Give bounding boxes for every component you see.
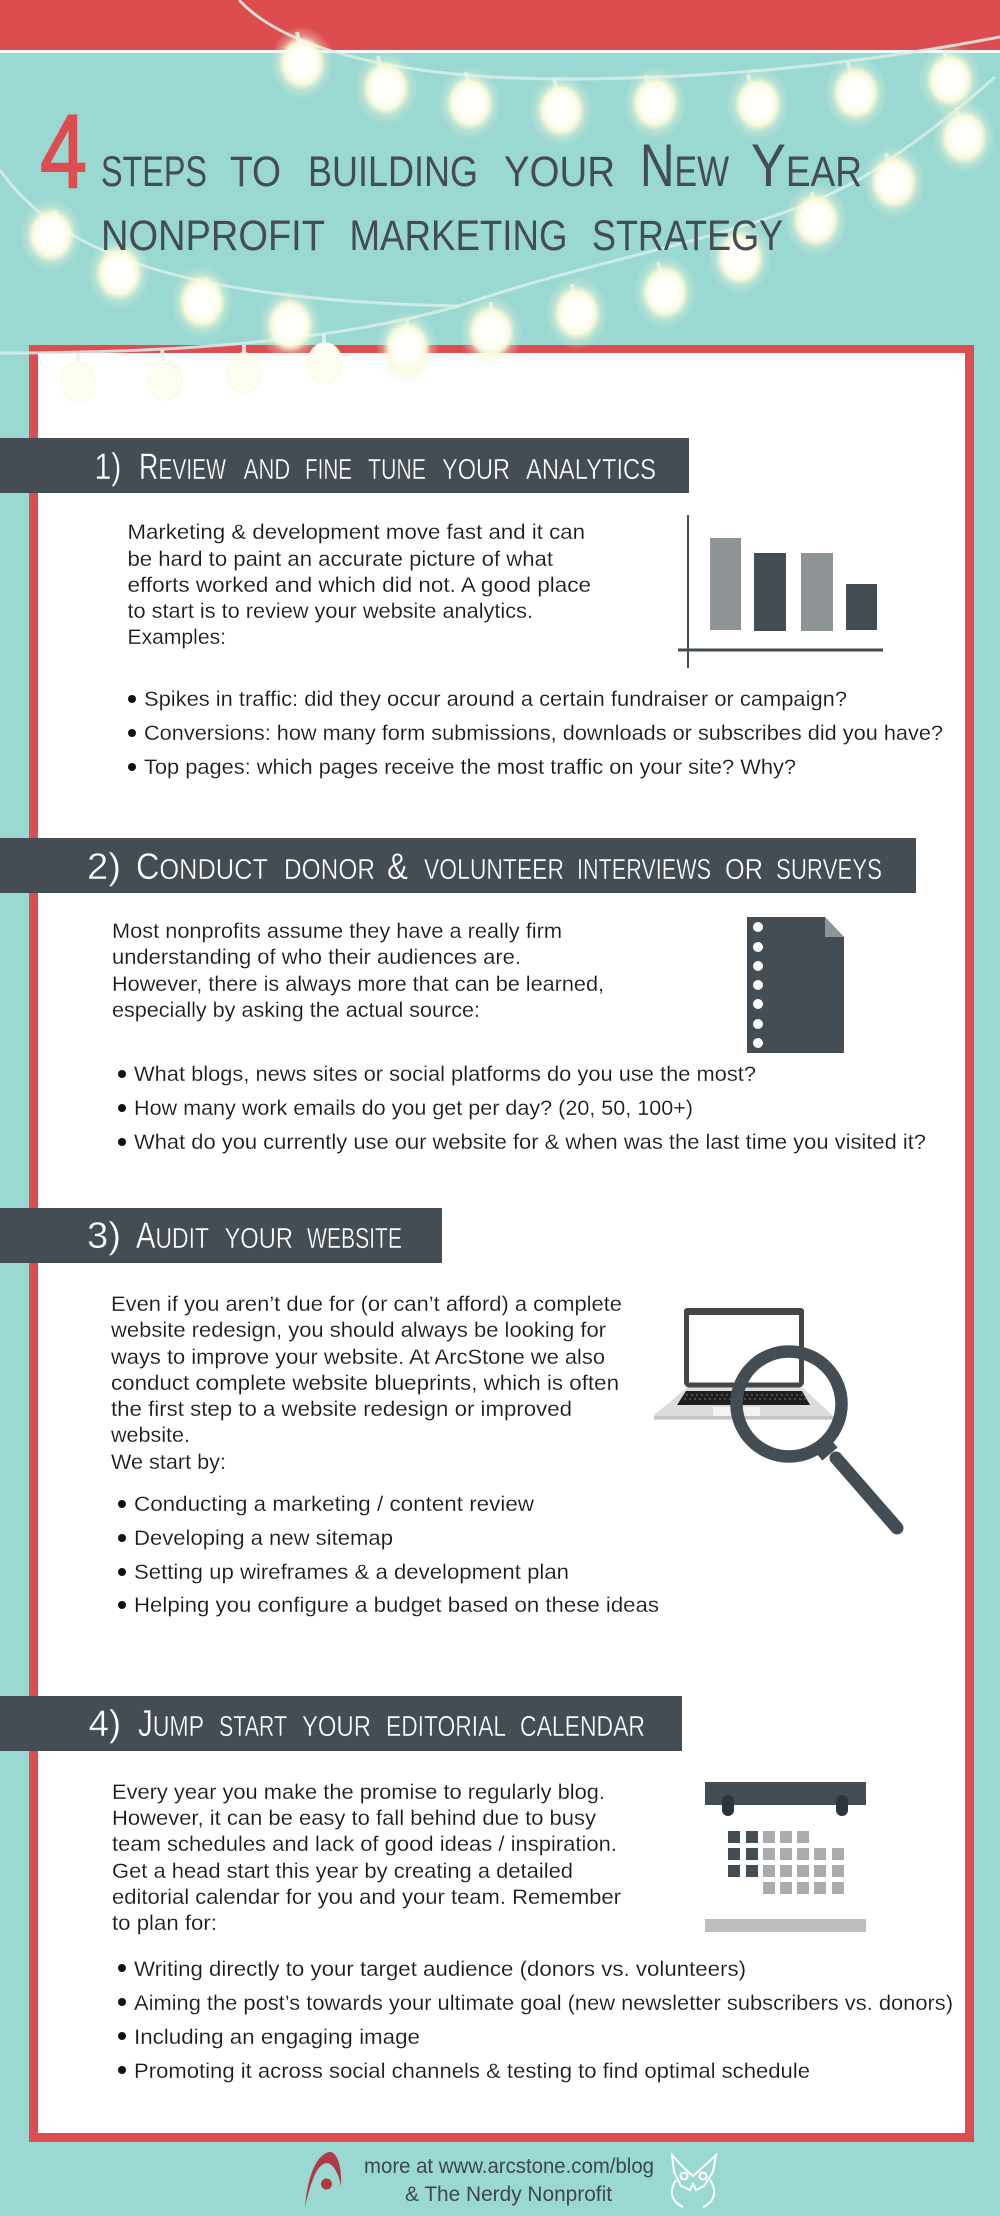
section 3 text: ways to improve your website. At ArcStone we also [110, 1346, 605, 1369]
section 3 heading: 3) [87, 1215, 121, 1256]
section 2 heading [0, 838, 916, 893]
section 2 bullets [118, 1063, 926, 1154]
section 4 heading: EDITORIAL [386, 1711, 506, 1743]
section 2 heading: & [387, 846, 408, 887]
section 3 heading: YOUR [224, 1223, 293, 1255]
section 1 bullets [128, 688, 943, 779]
section 1 heading: ANALYTICS [526, 454, 656, 486]
section 2 heading: INTERVIEWS [577, 854, 711, 886]
title: 4 [40, 94, 87, 210]
section 4 text: to plan for: [112, 1912, 217, 1935]
section 1 text: be hard to paint an accurate picture of what [128, 548, 553, 571]
panel: white content frame [29, 345, 974, 2142]
title: MARKETING [350, 213, 568, 260]
section 1 text: to start is to review your website analytics. [128, 600, 533, 623]
section 2 bullets: What blogs, news sites or social platforms do you use the most? [134, 1063, 756, 1086]
section 4 heading: CALENDAR [520, 1711, 645, 1743]
section 1 heading: TUNE [368, 454, 426, 486]
section 2 bullets: What do you currently use our website for & when was the last time you visited it? [134, 1131, 926, 1154]
section 2 heading: DONOR [284, 854, 375, 886]
section 3 bullets: Setting up wireframes & a development plan [134, 1561, 569, 1584]
section 3 text: Even if you aren’t due for (or can’t afford) a complete [111, 1293, 622, 1316]
section 2 text: understanding of who their audiences are. [112, 946, 521, 969]
section 3 text: conduct complete website blueprints, which is often [111, 1372, 619, 1395]
title: BUILDING [308, 149, 478, 196]
section 4 text: team schedules and lack of good ideas / inspiration. [112, 1833, 617, 1856]
top red banner [0, 0, 1000, 53]
section 1 text [128, 521, 591, 649]
section 2 heading: OR [725, 854, 763, 886]
section 1 bullets: Top pages: which pages receive the most traffic on your site? Why? [144, 756, 796, 779]
section 4 bullets: Aiming the post’s towards your ultimate goal (new newsletter subscribers vs. donors) [134, 1992, 953, 2015]
title: YEAR [751, 132, 862, 199]
section 1 text: efforts worked and which did not. A good place [128, 574, 591, 597]
section 4 text [112, 1781, 621, 1935]
section 1 heading [0, 438, 689, 493]
section 1 heading: YOUR [442, 454, 510, 486]
icon: ArcStone logo [305, 2152, 341, 2207]
bar chart icon [678, 515, 883, 668]
icon: owl logo [672, 2155, 716, 2207]
title: STEPS [101, 149, 207, 196]
icon: document [747, 917, 844, 1053]
icon: calendar [705, 1782, 866, 1932]
section 4 bullets: Writing directly to your target audience (donors vs. volunteers) [134, 1958, 746, 1981]
title: TO [230, 149, 281, 196]
section 4 heading: JUMP [138, 1703, 204, 1744]
section 2 text [112, 920, 604, 1022]
footer text: & The Nerdy Nonprofit [405, 2183, 612, 2206]
section 2 text: especially by asking the actual source: [112, 999, 480, 1022]
section 1 heading: AND [244, 454, 290, 486]
section 3 bullets [118, 1493, 659, 1617]
section 4 heading: START [219, 1711, 287, 1743]
section 4 text: Get a head start this year by creating a detailed [112, 1860, 573, 1883]
section 3 text [110, 1293, 622, 1474]
section 1 heading: REVIEW [139, 446, 226, 487]
section 3 text: the first step to a website redesign or improved [111, 1398, 572, 1421]
section 3 text: website. [110, 1424, 190, 1447]
footer text: more at www.arcstone.com/blog [364, 2155, 654, 2178]
section 2 bullets: How many work emails do you get per day? (20, 50, 100+) [134, 1097, 693, 1120]
section 1 bullets: Spikes in traffic: did they occur around a certain fundraiser or campaign? [144, 688, 847, 711]
title: NEW [640, 132, 729, 199]
section 1 heading: FINE [305, 454, 352, 486]
section 4 bullets: Including an engaging image [134, 2026, 420, 2049]
section 4 bullets: Promoting it across social channels & testing to find optimal schedule [134, 2060, 810, 2083]
section 2 heading: CONDUCT [136, 846, 268, 887]
section 4 text: Every year you make the promise to regularly blog. [112, 1781, 605, 1804]
section 2 heading: VOLUNTEER [424, 854, 564, 886]
section 1 bullets: Conversions: how many form submissions, downloads or subscribes did you have? [144, 722, 943, 745]
section 3 bullets: Conducting a marketing / content review [134, 1493, 535, 1516]
section 3 text: website redesign, you should always be looking for [110, 1319, 606, 1342]
section 2 text: Most nonprofits assume they have a really firm [112, 920, 562, 943]
section 2 text: However, there is always more that can be learned, [112, 973, 604, 996]
section 4 heading: 4) [89, 1703, 121, 1744]
title: STRATEGY [592, 213, 783, 260]
section 4 text: However, it can be easy to fall behind due to busy [112, 1807, 597, 1830]
section 3 text: We start by: [111, 1451, 226, 1474]
title: NONPROFIT [101, 213, 325, 260]
section 1 heading: 1) [94, 446, 121, 487]
section 1 text: Examples: [128, 626, 226, 649]
icon: laptop and magnifying glass [654, 1308, 897, 1528]
section 2 heading: SURVEYS [776, 854, 882, 886]
section 3 bullets: Helping you configure a budget based on these ideas [134, 1594, 659, 1617]
section 4 heading: YOUR [302, 1711, 371, 1743]
section 4 bullets [118, 1958, 953, 2083]
footer text [364, 2155, 654, 2206]
section 4 text: editorial calendar for you and your team. Remember [112, 1886, 621, 1909]
string lights decoration [0, 0, 1000, 402]
section 3 heading [0, 1208, 442, 1263]
section 1 text: Marketing & development move fast and it can [128, 521, 585, 544]
section 2 heading: 2) [87, 846, 121, 887]
section 3 heading: AUDIT [136, 1215, 209, 1256]
section 3 bullets: Developing a new sitemap [134, 1527, 393, 1550]
section 4 heading [0, 1696, 682, 1751]
section 3 heading: WEBSITE [307, 1223, 402, 1255]
title [40, 94, 862, 260]
title: YOUR [504, 149, 615, 196]
